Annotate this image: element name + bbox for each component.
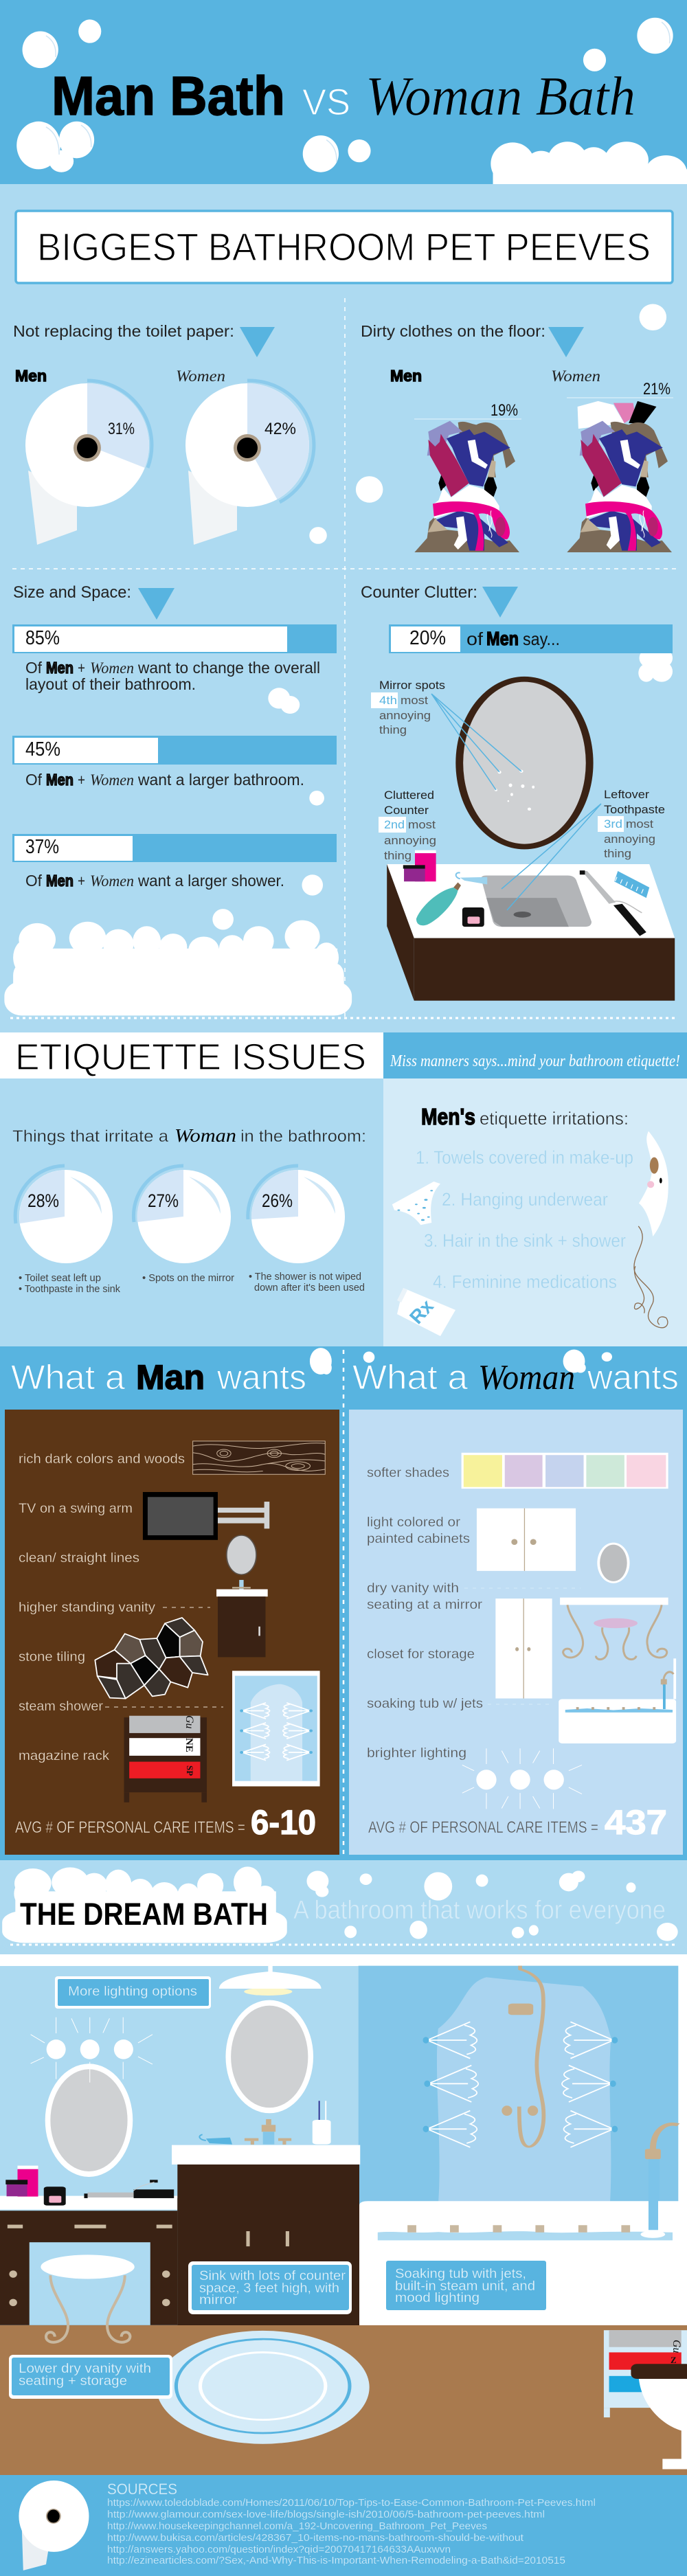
text: 85% caption: Women <box>90 659 134 677</box>
callout: cluttered counter: Counter <box>384 804 429 817</box>
icon: steam shower <box>232 1671 320 1786</box>
list of woman wants: closet for storage <box>367 1647 475 1662</box>
callout: more lighting options <box>55 1976 211 2009</box>
text: avg personal care men <box>15 1803 316 1842</box>
chart: 28%: 28% <box>27 1190 59 1211</box>
text: list of irritations: 4. Feminine medications <box>433 1272 617 1292</box>
heading: etiquette issues: ETIQUETTE ISSUES <box>15 1037 366 1078</box>
heading: what a man wants: Man <box>136 1358 205 1397</box>
header background <box>0 0 687 184</box>
heading: size and space: Size and Space: <box>13 583 131 602</box>
panel: sources <box>0 2475 687 2576</box>
callout: soaking tub: Soaking tub with jets, <box>395 2267 526 2281</box>
icon: underwear <box>392 1182 440 1225</box>
list of woman wants: painted cabinets <box>367 1531 470 1546</box>
bar: 20% of men say: Men <box>486 628 519 649</box>
text: sources: https://www.toledoblade.com/Homes/2011/06/10/Top-Tips-to-Ease-Common-Bathroom-Pet-Peeves.html <box>107 2498 596 2509</box>
text: 45% caption <box>25 771 304 789</box>
bar: 85% <box>12 624 337 653</box>
list of man wants: steam shower <box>19 1699 104 1714</box>
callout: lower dry vanity <box>9 2355 172 2399</box>
icon: men clothes pile 19%: 19% <box>491 401 518 420</box>
text: 37% caption: Of <box>25 872 43 890</box>
bar: 20% of men say: 20% <box>409 627 446 649</box>
panel: what a woman wants <box>349 1410 683 1855</box>
icon: dry vanity with stool <box>560 1598 668 1660</box>
text: sources: http://ezinearticles.com/?Sex,-And-Why-This-is-Important-When-Remodeling-a-Bath&id=2010515 <box>107 2555 565 2566</box>
panel: toilet paper <box>13 322 314 545</box>
callout: cluttered counter: thing <box>384 849 412 862</box>
text: avg personal care women: AVG # OF PERSONAL CARE ITEMS = <box>368 1818 598 1837</box>
list of man wants <box>19 1451 185 1763</box>
text: sources: http://answers.yahoo.com/question/index?qid=20070417164633AAuxwvn <box>107 2544 451 2555</box>
icon: colour swatches <box>462 1453 668 1489</box>
heading: biggest bathroom pet peeves <box>16 211 673 283</box>
list of man wants: magazine rack <box>19 1748 109 1763</box>
text: sources <box>107 2481 596 2566</box>
callout: leftover toothpaste: most <box>626 817 653 831</box>
heading: what a woman wants: wants <box>587 1358 679 1397</box>
text: bullet lists: • Spots on the mirror <box>142 1273 234 1284</box>
list of woman wants: brighter lighting <box>367 1745 466 1761</box>
chart: 26% <box>248 1166 345 1263</box>
text: 37% caption: Men <box>46 872 74 890</box>
callout: leftover toothpaste <box>502 788 665 910</box>
callout: leftover toothpaste: Toothpaste <box>604 803 665 816</box>
callout: sink: space, 3 feet high, with <box>199 2281 339 2296</box>
callout: cluttered counter: 2nd <box>384 818 405 831</box>
icon: vanity counter <box>387 850 675 1001</box>
icon: shower head and pipe <box>502 1966 543 2147</box>
chart: 27% <box>133 1166 231 1263</box>
text: 37% caption: + <box>78 872 85 890</box>
text: bullet lists: • The shower is not wiped <box>249 1272 361 1283</box>
callout: soaking tub: built-in steam unit, and <box>395 2279 535 2294</box>
list of woman wants: seating at a mirror <box>367 1597 483 1612</box>
heading: what a man wants <box>11 1358 306 1397</box>
text: sources: http://www.glamour.com/sex-love-life/blogs/single-ish/2010/06/5-bathroom-pet-peeves.html <box>107 2509 545 2520</box>
text: 37% caption: Women <box>90 872 134 890</box>
text: men's etiquette heading: Men's <box>421 1104 475 1129</box>
callout: cluttered counter <box>379 789 436 862</box>
text: bullet lists: • Toilet seat left up <box>19 1273 101 1284</box>
icon: prescription tube <box>397 1288 455 1336</box>
list of man wants: TV on a swing arm <box>19 1501 133 1516</box>
chart: 27%: 27% <box>148 1190 179 1211</box>
text: sources: http://www.bukisa.com/articles/428367_10-items-no-mans-bathroom-should-be-without <box>107 2533 523 2544</box>
list of man wants: higher standing vanity <box>19 1600 155 1615</box>
icon: sink counter and cabinet <box>0 2101 360 2496</box>
text: avg personal care women <box>368 1803 667 1842</box>
callout: cluttered counter: most <box>408 818 436 831</box>
callout: lower dry vanity: seating + storage <box>19 2374 127 2388</box>
callout: cluttered counter: annoying <box>384 834 436 847</box>
list of man wants: stone tiling <box>19 1649 85 1664</box>
bar: 85%: 85% <box>25 627 60 649</box>
text: list of irritations: 1. Towels covered in make-up <box>416 1147 633 1168</box>
text: avg personal care women: 437 <box>605 1803 667 1842</box>
callout: mirror spots: annoying <box>379 709 431 722</box>
icon: soaking tub <box>559 1658 676 1743</box>
heading: biggest bathroom pet peeves: BIGGEST BATHROOM PET PEEVES <box>37 225 651 269</box>
icon: women clothes pile 21% <box>567 380 673 552</box>
text: 45% caption: Women <box>90 771 134 789</box>
text: 85% caption: + <box>78 659 85 677</box>
section background: what a man or woman wants <box>0 1346 687 1860</box>
pet peeves section background <box>0 184 687 1033</box>
text: list of irritations: 3. Hair in the sink + shower <box>424 1230 626 1251</box>
icon: ceiling lamp <box>219 1966 322 1996</box>
callout: soaking tub <box>386 2261 546 2310</box>
title: Man Bath <box>52 65 285 126</box>
callout: leftover toothpaste: annoying <box>604 833 655 846</box>
heading: size and space <box>13 583 174 620</box>
icon: hair strand <box>634 1226 668 1328</box>
text: avg personal care men: 6-10 <box>251 1803 316 1842</box>
panel: dirty clothes <box>361 322 673 552</box>
chart: 26%: 26% <box>262 1190 293 1211</box>
panel: men's etiquette irritations <box>383 1078 687 1346</box>
text: 85% caption: Of <box>25 659 43 677</box>
icon: men clothes pile 19% <box>414 401 521 552</box>
text: men's etiquette heading <box>421 1104 629 1129</box>
text: 45% caption: + <box>78 771 85 789</box>
panel: what a man wants <box>5 1410 339 1855</box>
chart: 28% <box>15 1166 113 1263</box>
icon: oval mirror <box>455 677 594 849</box>
list of woman wants: dry vanity with <box>367 1581 459 1596</box>
icon: toilet roll <box>19 2481 89 2571</box>
text: sources: SOURCES <box>107 2481 177 2498</box>
icon: magazine rack: NE <box>183 1738 194 1752</box>
text: 85% caption: Men <box>46 659 74 677</box>
heading: dirty clothes on the floor <box>361 322 584 357</box>
text: 85% caption <box>25 659 320 693</box>
foam behind dream bath heading <box>2 1866 287 1943</box>
section background: dream bath heading <box>0 1860 687 1954</box>
icon: magazine rack: Gu <box>671 2340 682 2353</box>
chart: men toilet roll 31%: 31% <box>108 420 135 438</box>
text: things that irritate <box>12 1125 366 1146</box>
bar: 37% <box>12 834 337 862</box>
heading: what a man wants: What a <box>11 1358 125 1397</box>
men label: Men <box>15 367 47 385</box>
icon: magazine rack <box>604 2330 687 2417</box>
icon: magazine rack <box>124 1715 207 1803</box>
text: bullet lists: down after it's been used <box>254 1283 365 1293</box>
text: bullet lists <box>19 1272 365 1295</box>
heading: what a woman wants: Woman <box>478 1358 575 1397</box>
icon: cosmetics and curling iron <box>5 2166 174 2206</box>
title: Woman Bath <box>365 67 635 127</box>
chart: men toilet roll 31% <box>25 381 152 545</box>
bubbles <box>310 1348 612 1375</box>
panel: size and space <box>12 583 337 890</box>
icon: higher standing vanity <box>216 1535 268 1657</box>
bubbles <box>309 304 666 544</box>
chart: women toilet roll 42% <box>185 381 314 545</box>
text: 45% caption: Of <box>25 771 43 789</box>
text: sources: http://www.housekeepingchannel.com/a_192-Uncovering_Bathroom_Pet_Peeves <box>107 2521 487 2532</box>
bar: 45% <box>12 736 337 765</box>
icon: brighter lighting <box>462 1748 582 1809</box>
banner: miss manners <box>383 1032 687 1078</box>
title: VS <box>302 82 350 123</box>
callout: sink <box>188 2261 352 2314</box>
text: 37% caption <box>25 872 284 890</box>
icon: wood plank <box>193 1441 325 1474</box>
icon: towel <box>639 1131 668 1236</box>
icon: prescription tube: Rx <box>405 1296 438 1328</box>
text: 37% caption: want a larger shower. <box>137 872 284 890</box>
heading: the dream bath: THE DREAM BATH <box>20 1897 268 1932</box>
icon: women clothes pile 21%: 21% <box>643 380 671 398</box>
bar: 20% of men say: of <box>466 629 484 649</box>
heading: what a woman wants <box>352 1358 679 1397</box>
panel: dream bath scene <box>0 1966 687 2496</box>
wall <box>0 1966 359 2325</box>
icon: closet <box>495 1598 552 1699</box>
heading: what a woman wants: What a <box>352 1358 468 1397</box>
icon: shower faucet <box>645 2124 678 2207</box>
icon: toilet <box>631 2364 687 2470</box>
women label: Women <box>176 368 225 385</box>
text: things that irritate: Woman <box>174 1125 236 1146</box>
heading: counter clutter <box>361 583 518 618</box>
text: 45% caption: want a larger bathroom. <box>137 771 304 789</box>
bar: 37%: 37% <box>25 836 59 858</box>
women label: Women <box>551 368 600 385</box>
heading: dirty clothes on the floor: Dirty clothes on the floor: <box>361 322 545 340</box>
heading: counter clutter: Counter Clutter: <box>361 583 477 602</box>
callout: lower dry vanity: Lower dry vanity with <box>19 2362 151 2376</box>
text: bullet lists: • Toothpaste in the sink <box>19 1284 121 1295</box>
text: things that irritate: Things that irritate a <box>12 1127 169 1146</box>
text: 45% caption: Men <box>46 771 74 789</box>
callout: mirror spots: Mirror spots <box>379 679 445 692</box>
header foam <box>491 142 687 190</box>
icon: round mirror <box>597 1543 630 1583</box>
bar: 20% of men say: say... <box>523 629 560 649</box>
title <box>52 65 635 127</box>
icon: painted cabinets <box>477 1509 576 1571</box>
icon: magazine rack: Gu <box>183 1715 195 1729</box>
callout: leftover toothpaste: 3rd <box>604 817 622 831</box>
list of woman wants: light colored or <box>367 1515 461 1530</box>
icon: vanity mirror <box>45 2064 133 2177</box>
panel: counter clutter <box>361 583 675 1001</box>
list of woman wants: soaking tub w/ jets <box>367 1696 483 1711</box>
callout: sink: Sink with lots of counter <box>199 2269 346 2283</box>
callout: mirror spots: thing <box>379 723 407 736</box>
heading: not replacing the toilet paper: Not replacing the toilet paper: <box>13 322 234 340</box>
text: things that irritate: in the bathroom: <box>240 1127 366 1146</box>
header bubbles <box>16 18 673 172</box>
icon: bathtub <box>359 2196 687 2325</box>
callout: soaking tub: mood lighting <box>395 2291 480 2305</box>
callout: cluttered counter: Cluttered <box>384 789 434 802</box>
men label: Men <box>390 367 422 385</box>
list of man wants: clean/ straight lines <box>19 1550 139 1566</box>
callout: leftover toothpaste: thing <box>604 847 631 860</box>
list of man wants: rich dark colors and woods <box>19 1451 185 1467</box>
text: men's etiquette heading: etiquette irritations: <box>480 1108 629 1129</box>
callout: leftover toothpaste: Leftover <box>604 788 649 801</box>
bubbles and foam <box>4 646 673 1015</box>
text: list of irritations: 2. Hanging underwear <box>442 1189 608 1210</box>
callout: mirror spots: most <box>401 694 428 707</box>
callout: more lighting options: More lighting options <box>68 1985 197 1999</box>
callout: mirror spots <box>371 679 521 790</box>
icon: bath rug <box>157 2331 370 2444</box>
dry vanity with stool <box>0 2198 359 2342</box>
text: avg personal care men: AVG # OF PERSONAL CARE ITEMS = <box>15 1818 245 1837</box>
icon: sink mirror <box>225 2000 313 2113</box>
shower wall <box>359 1966 678 2208</box>
text: list of irritations <box>416 1147 633 1292</box>
text: 85% caption: layout of their bathroom. <box>25 675 196 693</box>
text: 85% caption: want to change the overall <box>137 659 320 677</box>
icon: tv on swing arm <box>143 1492 269 1540</box>
icon: magazine rack: SP <box>185 1765 195 1776</box>
chart: women toilet roll 42%: 42% <box>264 420 296 438</box>
bubbles <box>306 1871 678 1941</box>
list of woman wants <box>367 1465 483 1761</box>
icon: vanity lights <box>31 2018 153 2083</box>
floor <box>0 2325 687 2475</box>
icon: stone tiling <box>95 1618 208 1699</box>
bar: 20% of men say <box>389 624 673 653</box>
icon: magazine rack: Z <box>671 2355 677 2365</box>
callout: sink: mirror <box>199 2293 238 2307</box>
bar: 45%: 45% <box>25 738 60 760</box>
list of woman wants: softer shades <box>367 1465 449 1480</box>
panel: things that irritate a woman <box>0 1078 383 1346</box>
heading: what a man wants: wants <box>216 1358 306 1397</box>
heading: not replacing the toilet paper <box>13 322 275 357</box>
callout: mirror spots: 4th <box>379 694 397 707</box>
